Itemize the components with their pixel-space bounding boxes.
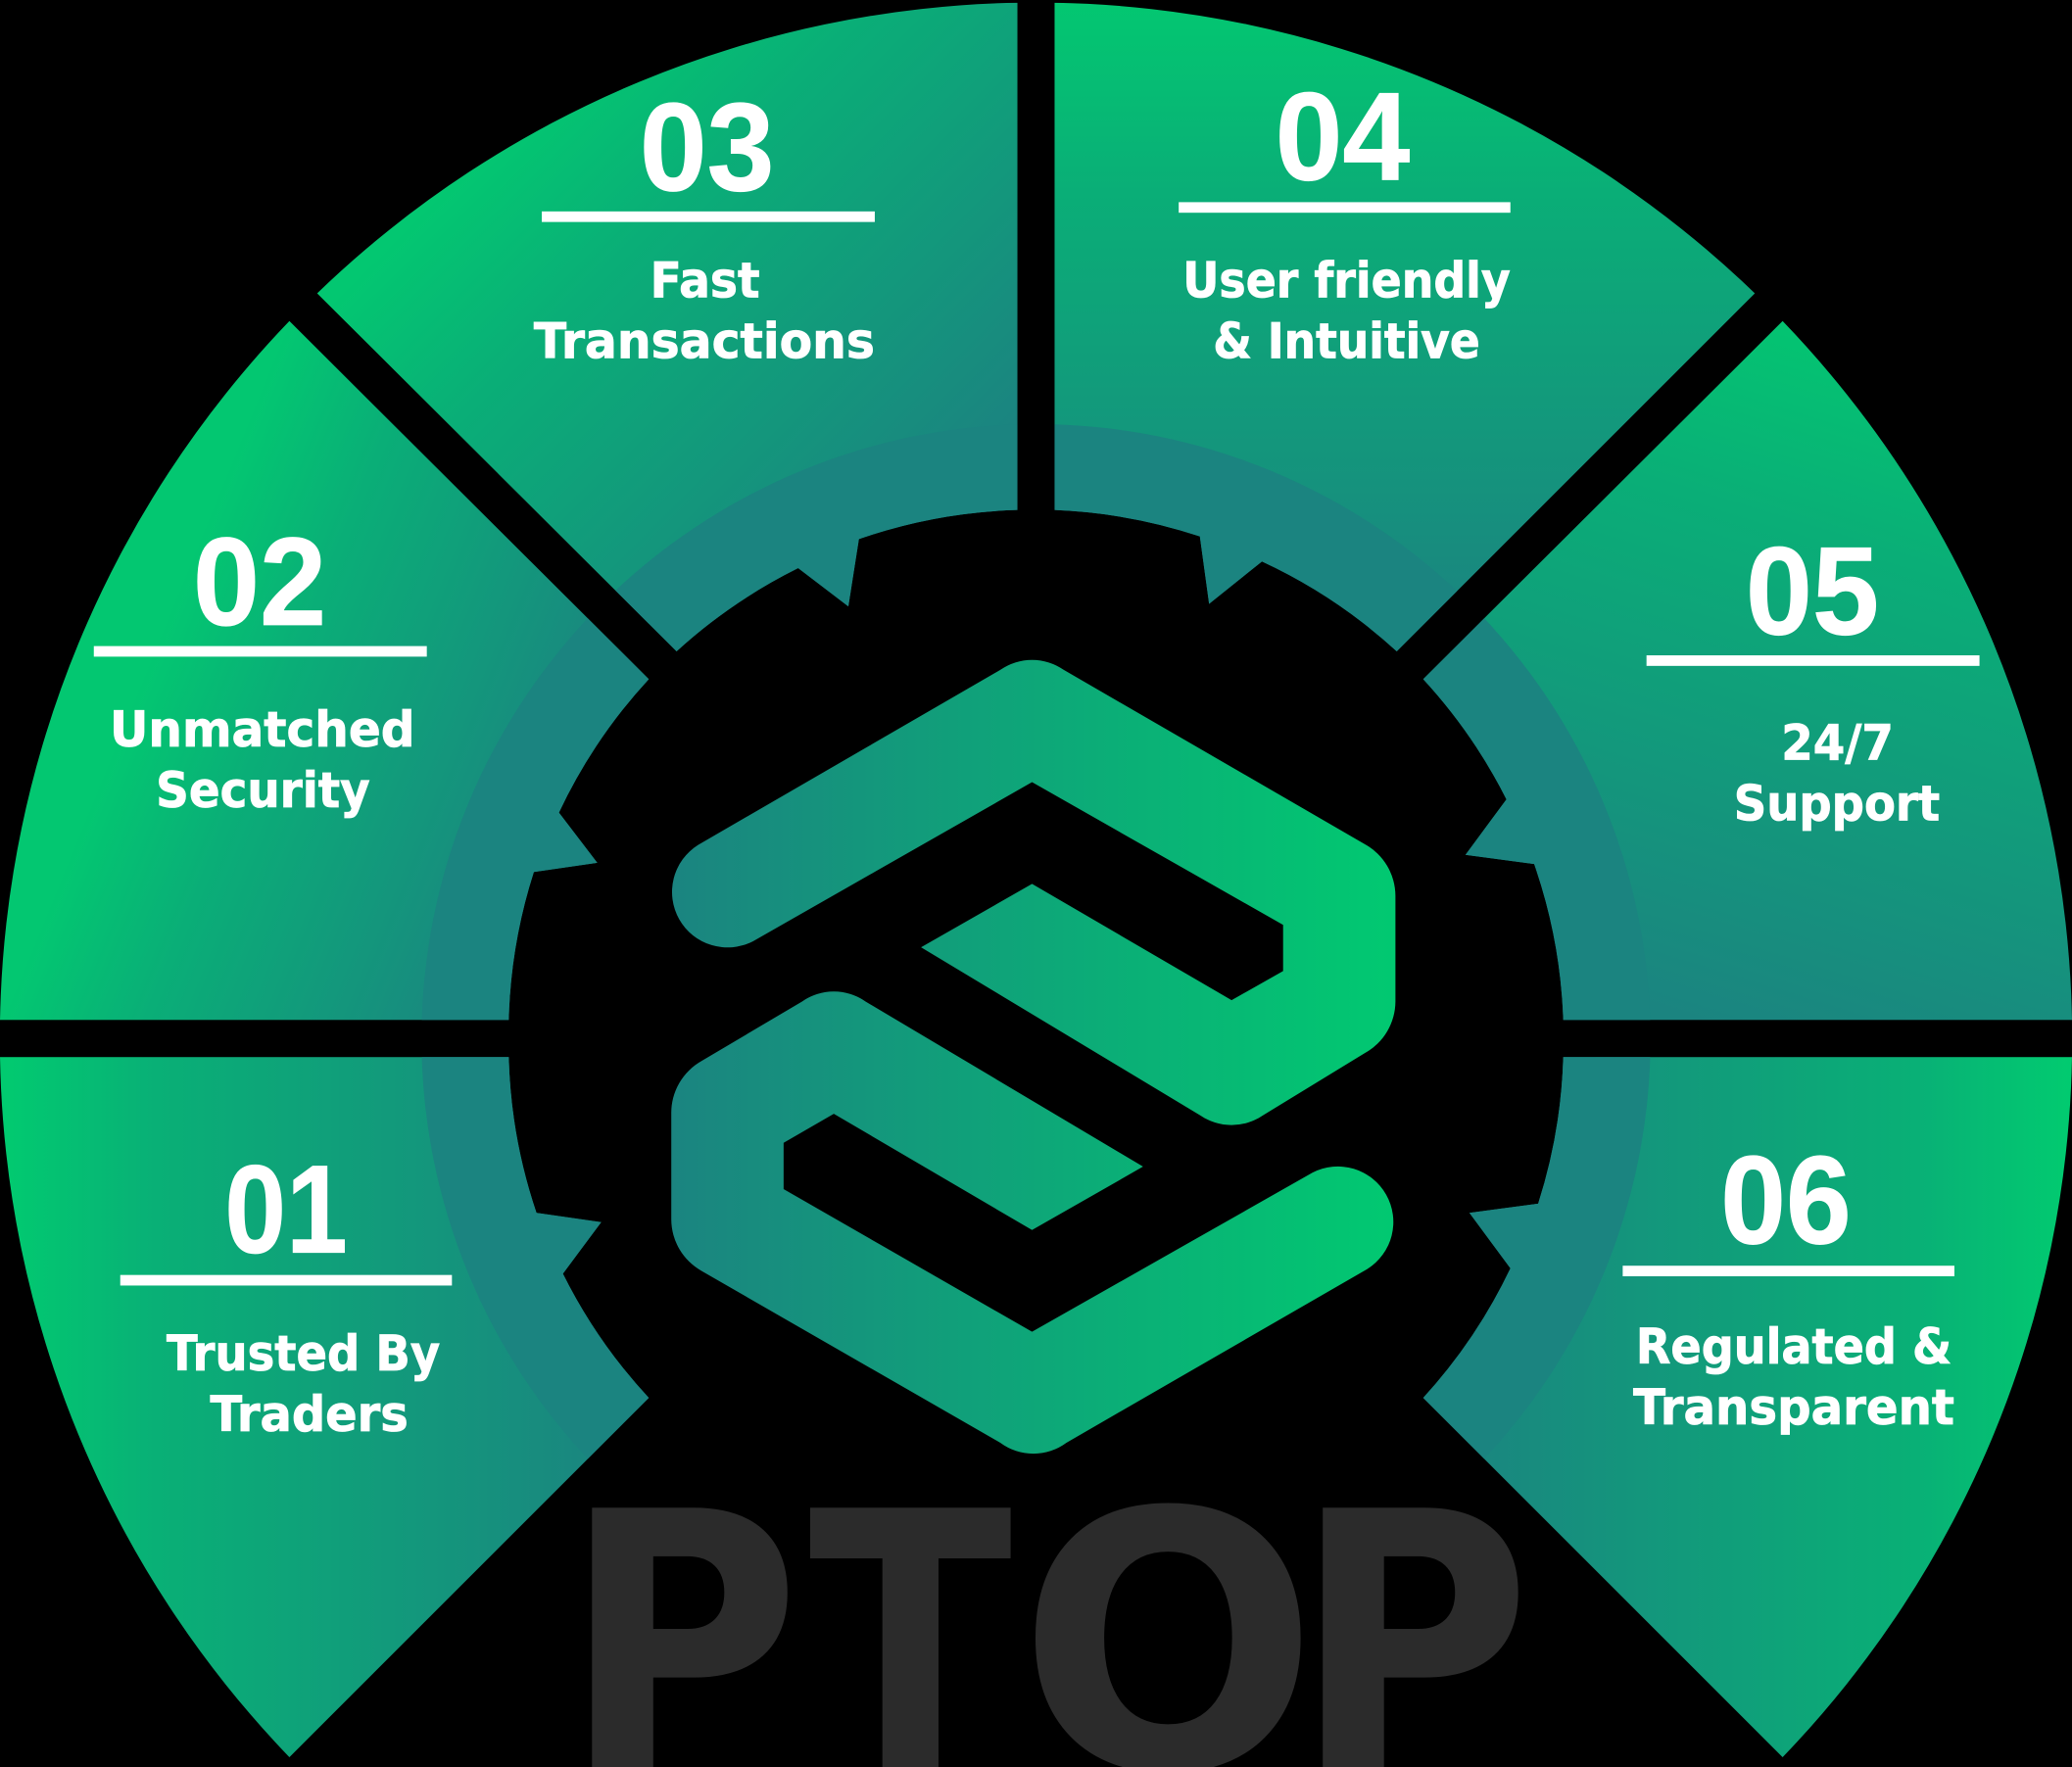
wedge 04 <box>1054 2 1756 651</box>
label 03: Fast <box>651 253 760 310</box>
label 05: Support <box>1734 776 1940 833</box>
divider 05 <box>1647 655 1980 666</box>
number 01: 01 <box>224 1140 348 1280</box>
number 04: 04 <box>1276 67 1410 207</box>
label 02 <box>110 701 415 819</box>
divider 02 <box>94 646 427 656</box>
number 03: 03 <box>640 77 774 217</box>
wedge 02 <box>0 321 649 1021</box>
panel: 01 Trusted By Traders <box>0 1057 649 1757</box>
label 02: Unmatched <box>110 701 415 758</box>
label 02: Security <box>156 762 370 819</box>
label 04: User friendly <box>1182 253 1511 310</box>
divider 01 <box>120 1275 452 1285</box>
label 04: & Intuitive <box>1213 313 1480 370</box>
label 06: Transparent <box>1633 1379 1954 1436</box>
label 05: 24/7 <box>1781 715 1894 772</box>
divider 06 <box>1622 1266 1954 1276</box>
wedge 05 <box>1422 321 2072 1021</box>
panel: 03 Fast Transactions <box>317 2 1018 651</box>
number 06: 06 <box>1720 1130 1852 1270</box>
wedge 06 <box>1422 1057 2072 1757</box>
icon: PTOP logo mark <box>671 660 1395 1454</box>
label 06 <box>1633 1318 1954 1436</box>
panel: 02 Unmatched Security <box>0 321 649 1021</box>
label 01: Traders <box>210 1386 409 1443</box>
label 05 <box>1734 715 1940 833</box>
label 03 <box>534 253 875 370</box>
panel: 05 24/7 Support <box>1422 321 2072 1021</box>
label 01 <box>167 1325 440 1443</box>
divider 03 <box>542 212 875 222</box>
panel: 04 User friendly & Intuitive <box>1054 2 1756 651</box>
number 05: 05 <box>1746 521 1879 661</box>
wedge 01 <box>0 1057 649 1757</box>
label 01: Trusted By <box>167 1325 440 1382</box>
divider 04 <box>1179 202 1511 213</box>
label 03: Transactions <box>534 313 875 370</box>
number 02: 02 <box>193 512 326 652</box>
panel: 06 Regulated & Transparent <box>1422 1057 2072 1757</box>
wedge 03 <box>317 2 1018 651</box>
label 06: Regulated & <box>1636 1318 1952 1375</box>
label 04 <box>1182 253 1511 370</box>
